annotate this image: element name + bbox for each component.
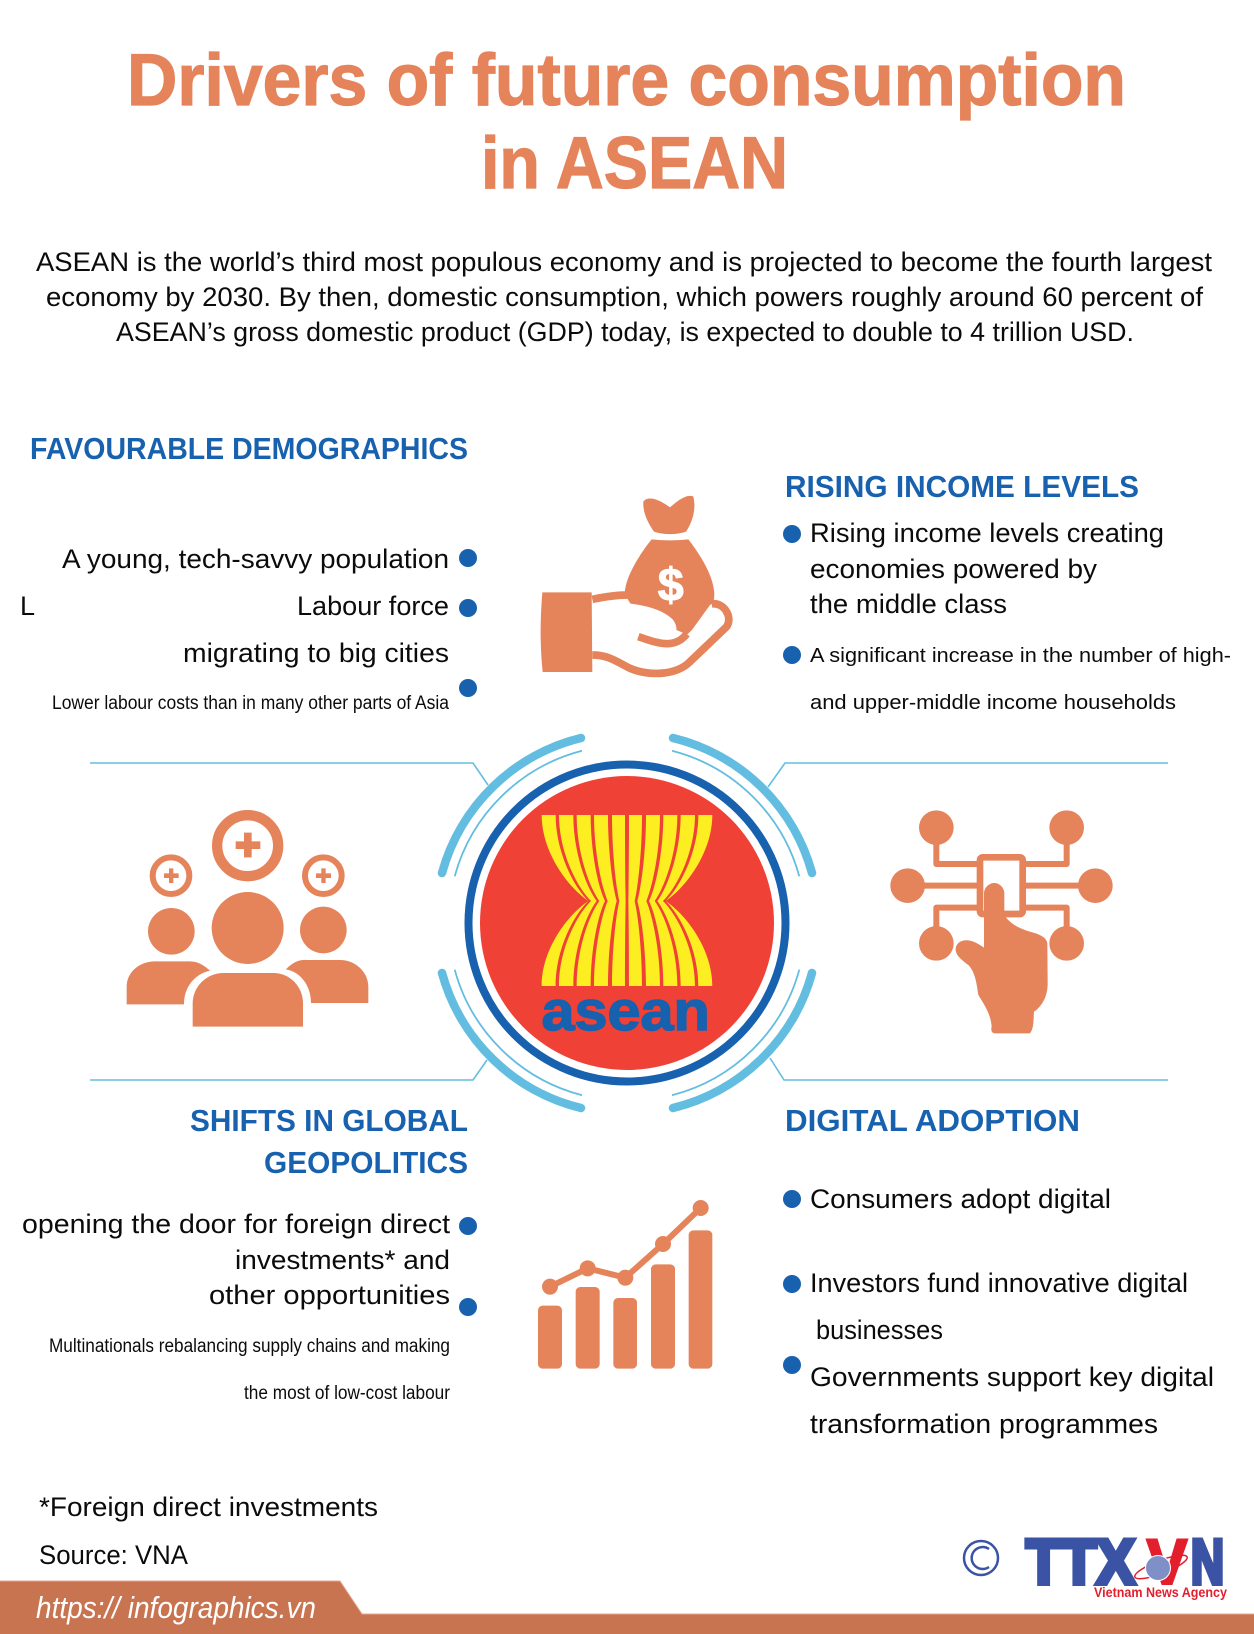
footnote and source: *Foreign direct investments [39, 1492, 378, 1522]
bullet text [22, 1209, 451, 1404]
bullet text [20, 544, 449, 714]
TTXVN wordmark: TTX [1026, 1528, 1135, 1598]
intro paragraph: economy by 2030. By then, domestic consumption, which powers roughly around 60 percent of [46, 282, 1203, 312]
agency tagline: Vietnam News Agency [1094, 1585, 1227, 1600]
bullet text: Multinationals rebalancing supply chains and making [49, 1336, 450, 1357]
bullet text: A significant increase in the number of high- [810, 645, 1231, 667]
icon: people with plus signs [127, 815, 368, 1027]
title: in ASEAN [481, 123, 788, 204]
bullet text: the middle class [810, 589, 1007, 619]
bullet text: economies powered by [810, 554, 1098, 584]
bullet text: Rising income levels creating [810, 518, 1164, 548]
bullet text: Investors fund innovative digital [810, 1268, 1188, 1298]
bullet text: the most of low-cost labour [244, 1383, 451, 1404]
logo: TTXVN Vietnam News Agency [964, 1528, 1227, 1600]
footnote and source [39, 1492, 378, 1570]
title [127, 40, 1126, 204]
panel: rising income levels [783, 469, 1231, 714]
footer banner [0, 1581, 1254, 1634]
bullet text: Labour force [297, 591, 449, 621]
bullet text: migrating to big cities [183, 638, 449, 668]
heading: digital adoption: DIGITAL ADOPTION [785, 1103, 1080, 1138]
title: Drivers of future consumption [127, 40, 1126, 121]
bullet text [810, 1184, 1214, 1439]
bullet text: investments* and [235, 1245, 450, 1275]
heading: favourable demographics: FAVOURABLE DEMOGRAPHICS [30, 431, 468, 466]
heading: shifts in global geopolitics: GEOPOLITICS [264, 1145, 468, 1180]
heading: rising income levels: RISING INCOME LEVELS [785, 469, 1139, 504]
bullet markers [783, 525, 801, 664]
icon: hand holding money bag [541, 496, 729, 673]
bullet markers [459, 549, 477, 697]
icon: hand touching digital network [890, 810, 1113, 1033]
intro paragraph [36, 247, 1212, 347]
ASEAN emblem [442, 738, 812, 1108]
website url: https:// infographics.vn [36, 1590, 316, 1625]
heading: shifts in global geopolitics: SHIFTS IN GLOBAL [190, 1103, 468, 1138]
TTXVN wordmark: V [1147, 1528, 1187, 1598]
heading: shifts in global geopolitics [190, 1103, 468, 1180]
bullet text: Lower labour costs than in many other parts of Asia [52, 693, 449, 714]
TTXVN wordmark [1026, 1528, 1224, 1598]
bullet text [810, 518, 1231, 714]
rice stalks [542, 815, 712, 986]
icon: hand holding money bag: $ [658, 559, 684, 611]
intro paragraph: ASEAN is the world’s third most populous economy and is projected to become the fourth largest [36, 247, 1212, 277]
outer arcs [442, 738, 812, 1108]
bullet text: Consumers adopt digital [810, 1184, 1111, 1214]
intro paragraph: ASEAN’s gross domestic product (GDP) today, is expected to double to 4 trillion USD. [116, 317, 1134, 347]
connector lines [90, 763, 1168, 1080]
bullet markers [459, 1217, 477, 1316]
bullet text: L [20, 591, 35, 621]
TTXVN wordmark: N [1191, 1528, 1224, 1598]
bullet markers [783, 1190, 801, 1374]
bullet text: A young, tech-savvy population [62, 544, 449, 574]
bullet text: other opportunities [209, 1280, 450, 1310]
copyright mark [964, 1541, 998, 1575]
bullet text: Governments support key digital [810, 1362, 1214, 1392]
bullet text: businesses [816, 1315, 943, 1345]
icon: rising bar chart [538, 1200, 712, 1369]
bullet text: opening the door for foreign direct [22, 1209, 451, 1239]
blue ring [468, 764, 786, 1082]
panel: favourable demographics [20, 431, 477, 714]
panel: shifts in global geopolitics [22, 1103, 477, 1404]
bullet text: transformation programmes [810, 1409, 1158, 1439]
asean wordmark: asean [542, 981, 710, 1043]
red disc [480, 776, 774, 1070]
panel: digital adoption [783, 1103, 1214, 1439]
globe and orbit [1133, 1551, 1189, 1583]
bullet text: and upper-middle income households [810, 692, 1176, 714]
footnote and source: Source: VNA [39, 1540, 188, 1570]
